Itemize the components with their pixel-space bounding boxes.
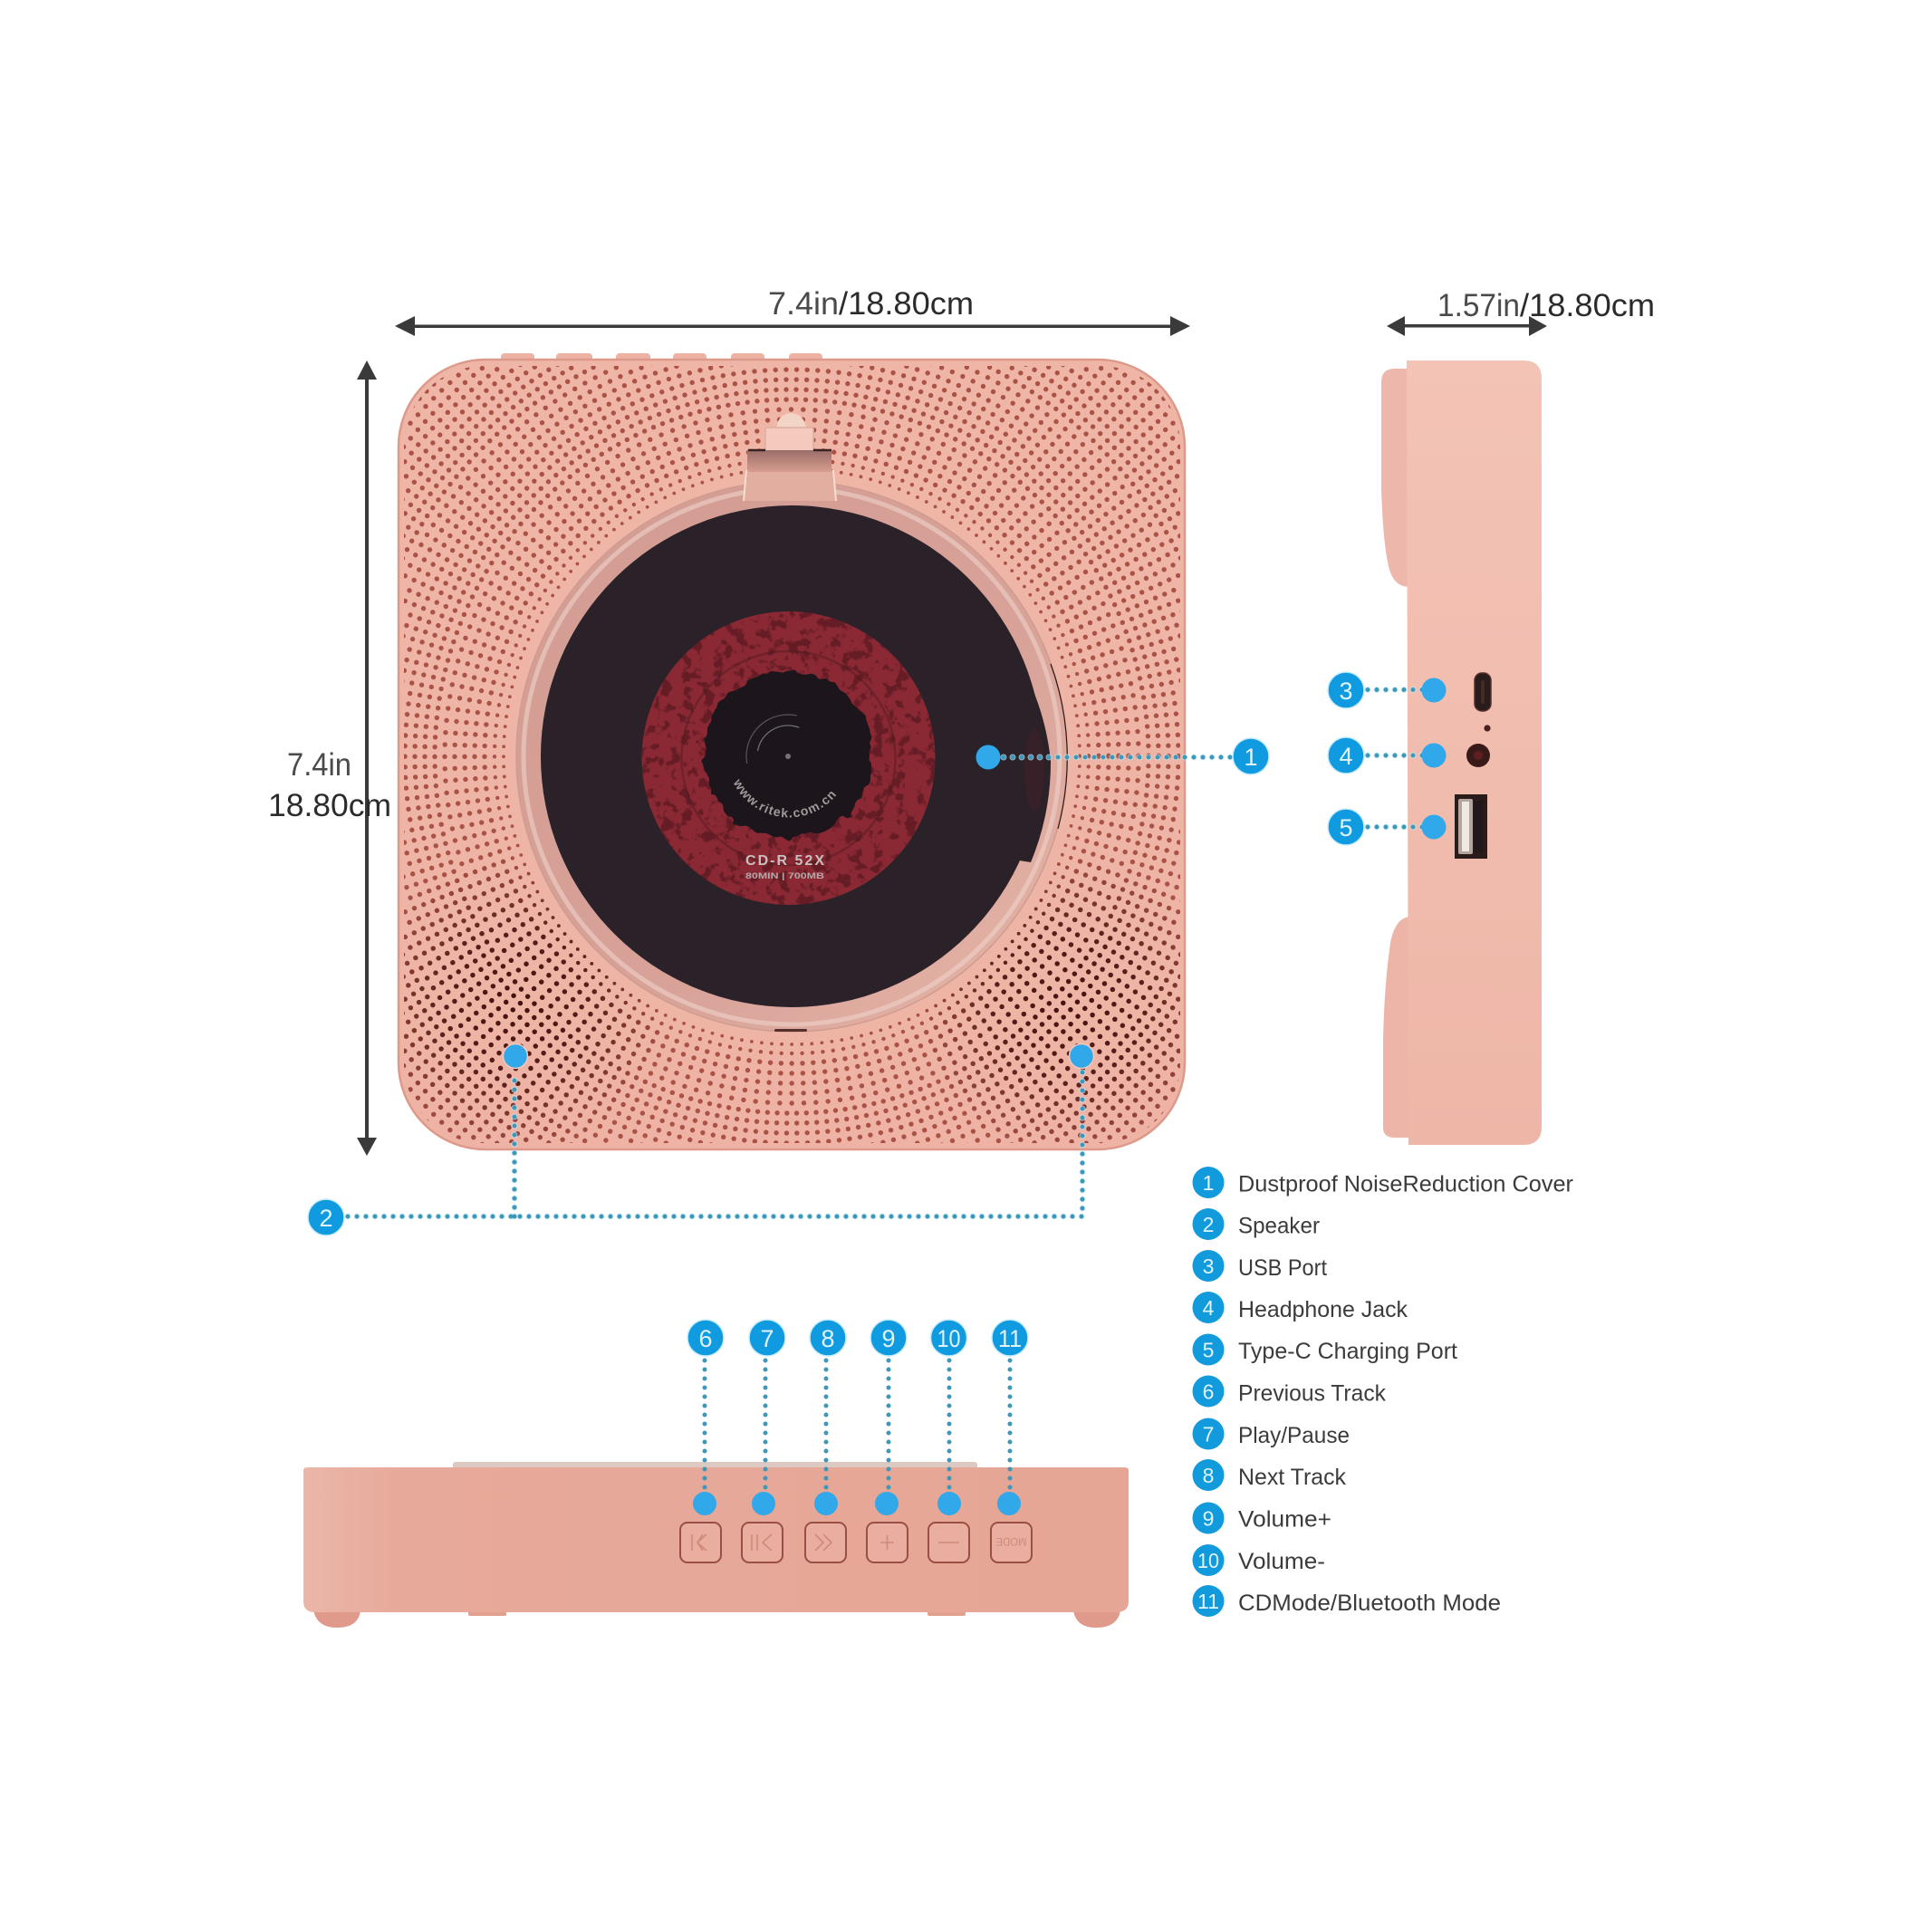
badge number: 5 <box>1339 814 1353 841</box>
disc text: www.ritek.com.cn <box>734 779 837 817</box>
button: volume down <box>928 1523 969 1562</box>
marker <box>693 1492 716 1515</box>
marker: right speaker <box>1069 1043 1094 1069</box>
badge <box>1328 737 1364 774</box>
legend item 5 <box>1192 1333 1457 1366</box>
badge number: 7 <box>760 1325 774 1352</box>
marker: left speaker <box>504 1043 527 1069</box>
legend item 5: 5 <box>1203 1339 1214 1362</box>
legend item 7 <box>1192 1418 1350 1449</box>
badge number: 10 <box>937 1325 960 1352</box>
button: previous track <box>680 1523 721 1562</box>
legend item 1 <box>1192 1167 1573 1198</box>
lower wall mount <box>1383 917 1409 1138</box>
arrow: height <box>357 360 377 1156</box>
leader dots <box>824 1360 828 1495</box>
button: play/pause <box>742 1523 783 1562</box>
leader dots <box>1368 824 1424 830</box>
callout 2: speakers <box>308 1043 1094 1235</box>
callout 7 <box>749 1320 785 1515</box>
badge number: 8 <box>821 1325 835 1352</box>
legend item 3: 3 <box>1203 1254 1214 1278</box>
legend item 9: 9 <box>1203 1507 1214 1531</box>
panel: top edge view with buttons <box>303 1462 1129 1628</box>
marker <box>1422 815 1446 839</box>
clear cover ring <box>516 481 1067 1032</box>
label: width: /18.80cm <box>839 286 974 322</box>
panel: side view <box>1381 360 1542 1145</box>
device body <box>303 1467 1129 1612</box>
depth dimension: side view <box>1387 288 1655 336</box>
legend item 9 <box>1192 1502 1331 1534</box>
marker <box>937 1492 961 1515</box>
button: mode <box>991 1523 1032 1562</box>
top buttons edge <box>501 353 822 364</box>
width dimension: front view <box>395 286 1190 336</box>
badge <box>810 1320 846 1356</box>
label: depth: /18.80cm <box>1520 288 1655 323</box>
leader dots <box>348 1072 1082 1216</box>
leader dots <box>1004 755 1234 759</box>
legend item 2 <box>1192 1208 1320 1240</box>
badge <box>749 1320 785 1356</box>
callout 11 <box>992 1320 1028 1515</box>
leader halo <box>1368 824 1424 830</box>
leader dots <box>1007 1360 1013 1495</box>
label: depth <box>1437 288 1655 323</box>
legend item 11: CDMode/Bluetooth Mode <box>1238 1591 1501 1616</box>
side body <box>1407 360 1542 1145</box>
legend item 1: 1 <box>1203 1171 1214 1195</box>
legend item 4 <box>1192 1292 1408 1323</box>
label: width <box>768 286 974 322</box>
legend item 3: USB Port <box>1238 1255 1327 1281</box>
number badge <box>1233 738 1269 774</box>
marker dot <box>976 745 1000 770</box>
cover strip <box>453 1462 977 1469</box>
callout 3 <box>1328 672 1446 708</box>
small feet <box>468 1610 966 1616</box>
badge <box>1328 672 1364 708</box>
USB port <box>1455 794 1487 859</box>
badge number: 3 <box>1339 678 1353 705</box>
badge number: 9 <box>881 1325 896 1352</box>
legend item 9: Volume+ <box>1238 1507 1331 1533</box>
device body <box>399 360 1185 1149</box>
disc text <box>734 779 837 881</box>
disc graphic ring <box>641 611 935 905</box>
label: height: 18.80cm <box>268 788 391 823</box>
height dimension: front view <box>268 360 391 1156</box>
marker <box>752 1492 775 1515</box>
legend item 10: 10 <box>1197 1549 1219 1572</box>
button: volume up <box>867 1523 908 1562</box>
leader dots <box>703 1360 706 1495</box>
badge number: 1 <box>1244 744 1258 771</box>
left foot <box>313 1610 360 1628</box>
legend item 11: 11 <box>1197 1590 1219 1613</box>
label: height <box>268 747 391 823</box>
legend item 8: Next Track <box>1238 1465 1346 1490</box>
legend item 8 <box>1192 1459 1346 1491</box>
leader halo <box>1004 754 1234 761</box>
callout 10 <box>931 1320 967 1515</box>
legend item 7: 7 <box>1203 1422 1214 1446</box>
disc right edge <box>996 675 1051 862</box>
marker <box>1422 678 1446 703</box>
leader dots <box>1368 754 1424 757</box>
button: mode: MODE <box>996 1535 1027 1548</box>
legend item 8: 8 <box>1203 1464 1214 1487</box>
speaker grille dots <box>404 366 1180 1143</box>
type-C port <box>1475 673 1491 711</box>
leader halo <box>1368 687 1424 693</box>
marker <box>997 1492 1021 1515</box>
leader dots <box>947 1360 951 1495</box>
callout 4 <box>1328 737 1446 774</box>
legend item 4: Headphone Jack <box>1238 1297 1408 1322</box>
badge <box>1328 809 1364 845</box>
callout 8 <box>810 1320 846 1515</box>
leader dots <box>763 1360 768 1495</box>
right foot <box>1073 1610 1120 1628</box>
legend item 6 <box>1192 1375 1386 1408</box>
badge number: 4 <box>1339 743 1353 770</box>
marker <box>1422 743 1446 768</box>
button: next track <box>805 1523 846 1562</box>
leader dots <box>886 1360 891 1495</box>
legend item 2: Speaker <box>1238 1214 1320 1239</box>
leader dots <box>1368 687 1424 692</box>
badge number: 11 <box>998 1325 1022 1352</box>
badge <box>931 1320 967 1356</box>
badge <box>870 1320 907 1356</box>
leader lines halo <box>348 1072 1082 1216</box>
badge number: 2 <box>319 1205 333 1232</box>
label: width: 7.4in <box>768 286 839 322</box>
upper wall mount <box>1381 369 1409 587</box>
legend item 1: Dustproof NoiseReduction Cover <box>1238 1172 1573 1197</box>
disc right tint <box>1024 728 1044 812</box>
badge number: 6 <box>698 1325 713 1352</box>
legend item 6: Previous Track <box>1238 1380 1386 1406</box>
legend item 3 <box>1192 1250 1327 1282</box>
callout 9 <box>870 1320 907 1515</box>
legend item 4: 4 <box>1203 1296 1215 1320</box>
callout 5 <box>1328 809 1446 845</box>
label: depth: 1.57in <box>1437 288 1520 323</box>
legend item 6: 6 <box>1203 1380 1214 1404</box>
cover tab <box>744 413 836 501</box>
leader halo <box>1368 752 1424 759</box>
callout 1: cover <box>976 738 1269 774</box>
panel: front view of CD player <box>397 353 1187 1150</box>
legend item 11 <box>1192 1585 1501 1617</box>
label: height: 7.4in <box>287 747 351 783</box>
headphone jack <box>1466 744 1490 767</box>
legend item 10: Volume- <box>1238 1549 1325 1574</box>
number badge <box>308 1199 344 1235</box>
arrow: depth <box>1387 316 1547 336</box>
arrow: width <box>395 316 1190 336</box>
cover bottom slot <box>774 1029 807 1032</box>
callout 6 <box>687 1320 724 1515</box>
legend item 10 <box>1192 1544 1325 1576</box>
disc text: 80MIN | 700MB <box>745 871 824 881</box>
marker <box>814 1492 838 1515</box>
indicator light <box>1484 725 1491 732</box>
legend item 7: Play/Pause <box>1238 1423 1350 1448</box>
legend <box>1192 1167 1573 1617</box>
badge <box>687 1320 724 1356</box>
disc text: CD-R 52X <box>745 853 824 869</box>
CD disc <box>541 505 1051 1007</box>
marker <box>875 1492 899 1515</box>
badge <box>992 1320 1028 1356</box>
legend item 2: 2 <box>1203 1213 1214 1236</box>
legend item 5: Type-C Charging Port <box>1238 1339 1457 1364</box>
